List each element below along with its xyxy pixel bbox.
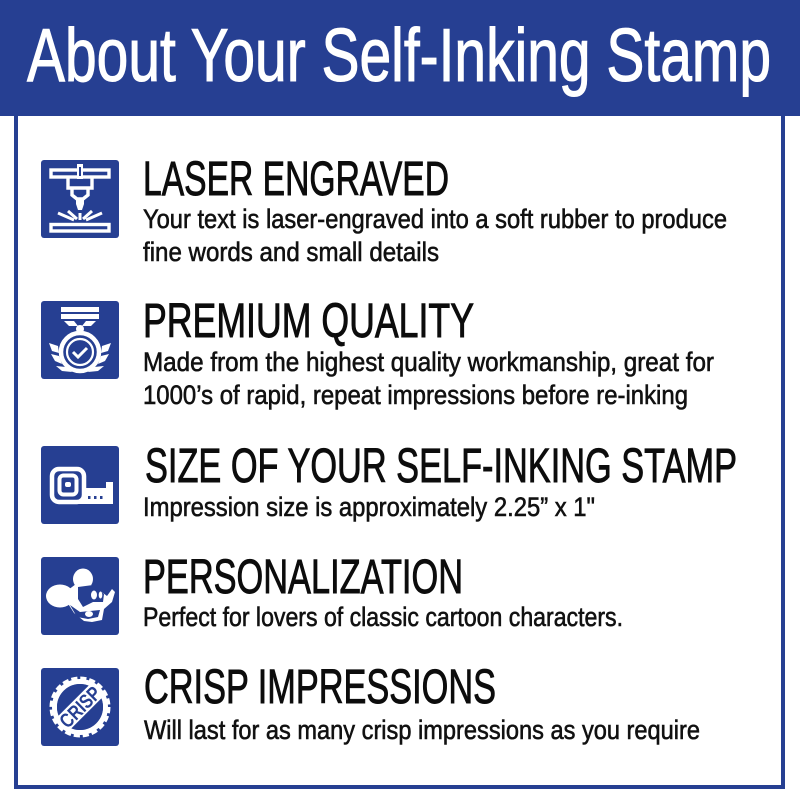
- text: premium quality line 1: Made from the highest quality workmanship, great for: [143, 347, 714, 377]
- header banner: [0, 0, 800, 116]
- icon: crisp seal: [41, 668, 119, 746]
- icon: tape measure: [41, 446, 119, 524]
- text: laser engraved line 1: Your text is laser-engraved into a soft rubber to produce: [143, 204, 727, 234]
- icon: laser engraver: [41, 160, 119, 238]
- icon: cartoon mouse head: [41, 557, 119, 635]
- icon: crisp seal: CRISP: [56, 683, 106, 733]
- heading: laser engraved: LASER ENGRAVED: [143, 153, 449, 206]
- text: crisp description: Will last for as many crisp impressions as you require: [144, 715, 700, 745]
- text: laser engraved line 2: fine words and small details: [143, 237, 439, 267]
- text: personalization description: Perfect for lovers of classic cartoon characters.: [143, 602, 623, 632]
- text: size description: Impression size is approximately 2.25” x 1": [143, 492, 595, 522]
- heading: premium quality: PREMIUM QUALITY: [143, 295, 474, 348]
- heading: personalization: PERSONALIZATION: [143, 551, 463, 604]
- icon: premium medal: [41, 301, 119, 379]
- text: premium quality line 2: 1000’s of rapid, repeat impressions before re-inking: [143, 380, 688, 410]
- heading: crisp impressions: CRISP IMPRESSIONS: [144, 661, 496, 714]
